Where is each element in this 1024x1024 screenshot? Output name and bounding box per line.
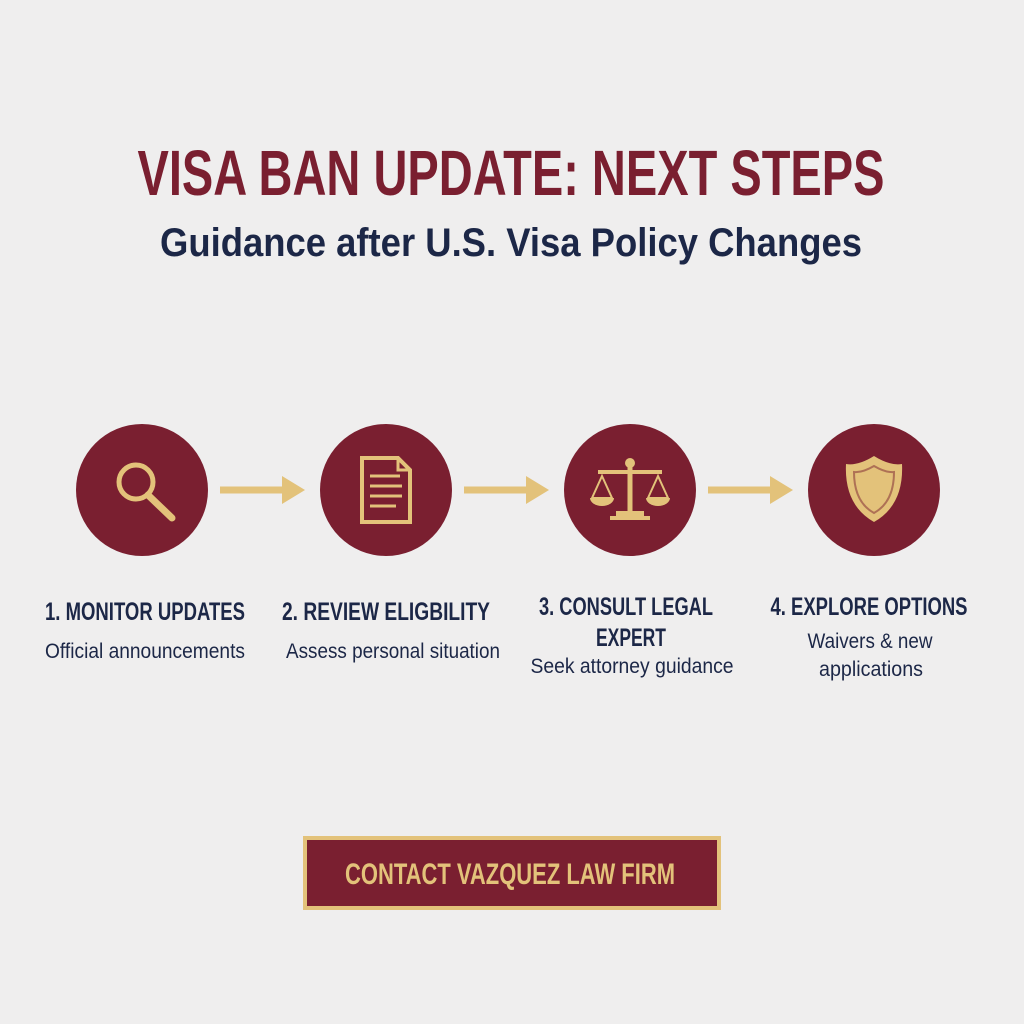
arrow 2 xyxy=(464,476,549,504)
step 1 text xyxy=(45,598,245,663)
step 3 text xyxy=(530,593,734,678)
step 3 text: 3. CONSULT LEGAL xyxy=(539,593,713,621)
step 2 text: 2. REVIEW ELIGBILITY xyxy=(282,598,490,626)
step 2 icon: document xyxy=(320,424,452,556)
step 3 text: EXPERT xyxy=(596,624,666,652)
step 2 text xyxy=(282,598,500,663)
step 4 text: applications xyxy=(819,658,923,681)
step 3 icon: scales xyxy=(564,424,696,556)
step 4 icon: shield xyxy=(808,424,940,556)
subtitle: Guidance after U.S. Visa Policy Changes xyxy=(160,221,862,265)
button: contact xyxy=(305,838,719,908)
step 2 text: Assess personal situation xyxy=(286,640,500,663)
step 1 text: Official announcements xyxy=(45,640,245,663)
arrow 1 xyxy=(220,476,305,504)
step 3 text: Seek attorney guidance xyxy=(530,655,734,678)
step 1 text: 1. MONITOR UPDATES xyxy=(45,598,245,626)
step 1 icon: magnifier xyxy=(76,424,208,556)
arrow 3 xyxy=(708,476,793,504)
step 4 text xyxy=(770,593,968,681)
button: contact: CONTACT VAZQUEZ LAW FIRM xyxy=(345,858,675,891)
step 4 text: Waivers & new xyxy=(808,630,933,653)
